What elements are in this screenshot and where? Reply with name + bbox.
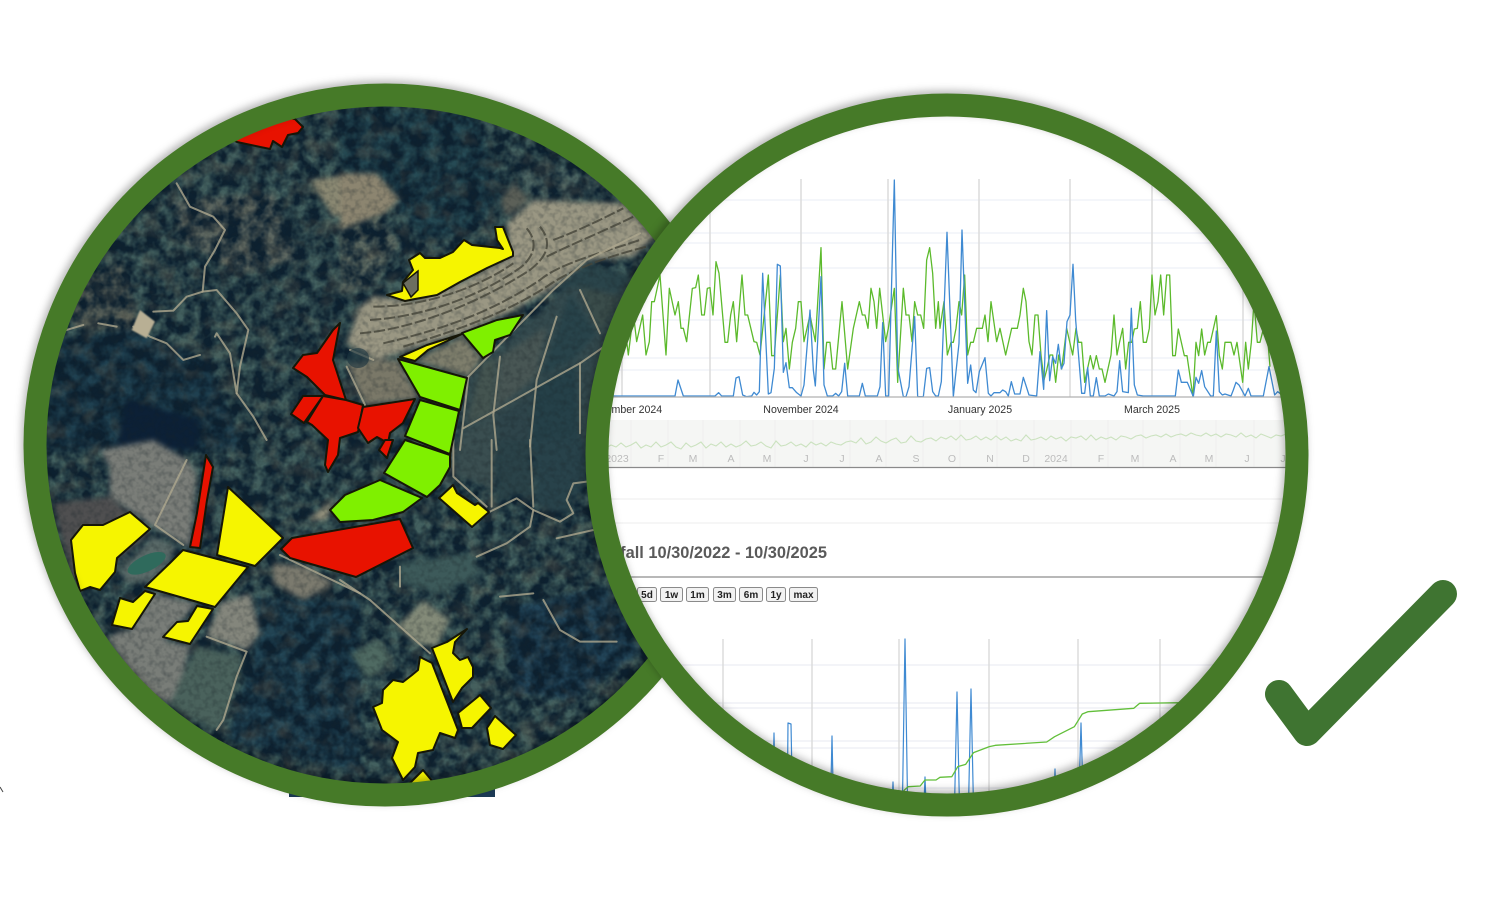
upper chart x-axis labels: September 2024 [584,404,662,416]
field parcels: red, yellow and green [71,110,523,795]
upper chart x-axis labels: November 2024 [763,404,839,416]
overview month labels: D [1022,453,1030,465]
overview month labels: J [803,453,809,465]
upper chart baseline [600,396,1290,398]
overview month labels: F [1098,453,1104,465]
panel: satellite map circle [30,90,750,810]
yellow parcels [71,227,516,795]
range selector strip [600,420,1306,468]
lower chart gridlines [682,639,1212,791]
chart heading: Rainfall 10/30/2022 - 10/30/2025 [585,544,827,562]
overview month labels: A [727,453,735,465]
green parcels [330,315,523,522]
upper chart gridlines [600,179,1290,397]
red parcels [190,110,415,577]
upper chart: blue series [610,180,1283,397]
left circle ring [35,95,735,795]
lower chart: green series [900,703,1185,797]
overview month labels: 2023 [605,453,629,465]
chart screenshot [608,179,1286,794]
overview month labels: J [1244,453,1250,465]
overview month labels: A [875,453,883,465]
range buttons [638,588,818,602]
range buttons: max [793,590,814,601]
overview month labels: F [658,453,664,465]
forest tones [47,110,640,773]
overview line [606,433,1306,449]
overview month labels: O [948,453,956,465]
right circle ring [597,105,1297,805]
overview month labels: M [689,453,697,465]
overview month labels: S [912,453,920,465]
overview month labels: 2024 [1044,453,1068,465]
overview month labels [608,455,1285,462]
lower chart: blue series [773,638,1083,794]
forest texture [46,106,655,784]
range buttons: 5d [641,590,653,601]
roads and terraces [67,183,267,440]
upper chart x-axis labels: January 2025 [948,404,1012,416]
overview month labels: M [763,453,771,465]
overview month labels: N [986,453,994,465]
range buttons: 1m [690,590,705,601]
overview month labels: J [1280,453,1286,465]
image edge below left circle [289,775,495,797]
icon: check mark [1279,594,1443,732]
stray mark at left edge [0,787,3,792]
overview month labels: J [839,453,845,465]
upper chart x-axis labels: March 2025 [1124,404,1180,416]
satellite imagery background [46,106,656,784]
panel: rainfall charts circle [584,95,1307,830]
white disc [587,95,1307,815]
range buttons: 1y [770,590,782,601]
range buttons: 6m [744,590,758,601]
fine grain [47,109,652,776]
upper chart: green series [613,248,1270,397]
overview month labels: M [1131,453,1139,465]
upper chart x-axis labels [612,405,1180,416]
fields and plantations [53,173,660,730]
range buttons: 3m [717,590,732,601]
overview month labels: A [1169,453,1177,465]
overview month labels: M [1205,453,1213,465]
range buttons: 1w [665,590,678,601]
